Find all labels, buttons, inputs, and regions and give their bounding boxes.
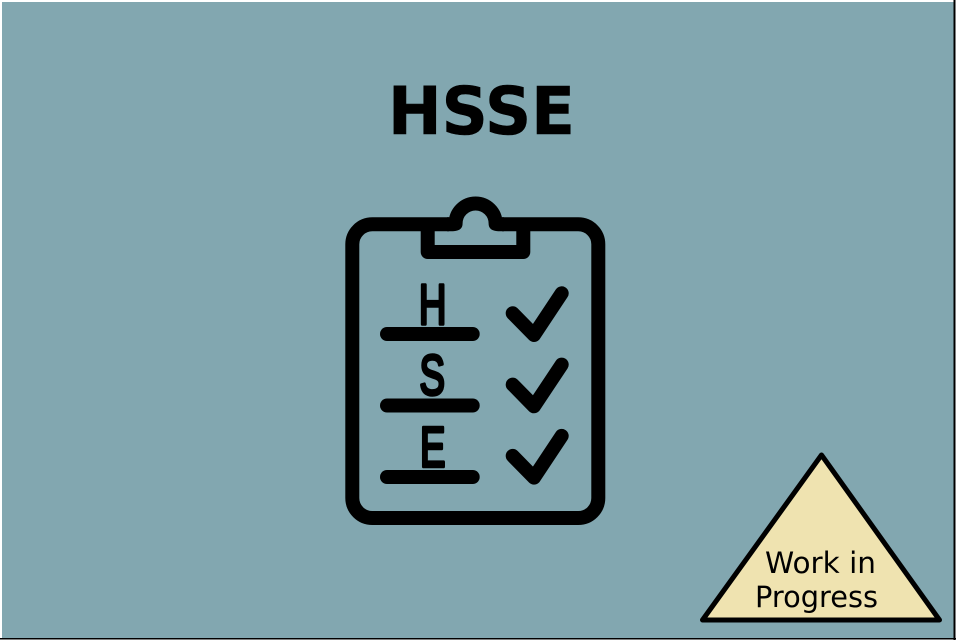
checklist row: S: S — [419, 344, 445, 407]
checklist row: H: H — [419, 274, 446, 337]
warning triangle — [702, 455, 940, 620]
checklist row: E — [387, 416, 562, 479]
callout text: Work in — [765, 546, 876, 580]
callout text: Progress — [755, 580, 878, 614]
checklist row: S — [387, 344, 562, 407]
icon: HSSE clipboard checklist — [352, 204, 598, 518]
clipboard board — [352, 224, 598, 518]
callout text — [755, 546, 878, 614]
clipboard clip — [428, 204, 523, 252]
checklist row: H — [387, 274, 562, 337]
callout: work in progress — [702, 455, 940, 620]
title: HSSE — [388, 73, 575, 150]
checklist row: E: E — [420, 416, 445, 479]
